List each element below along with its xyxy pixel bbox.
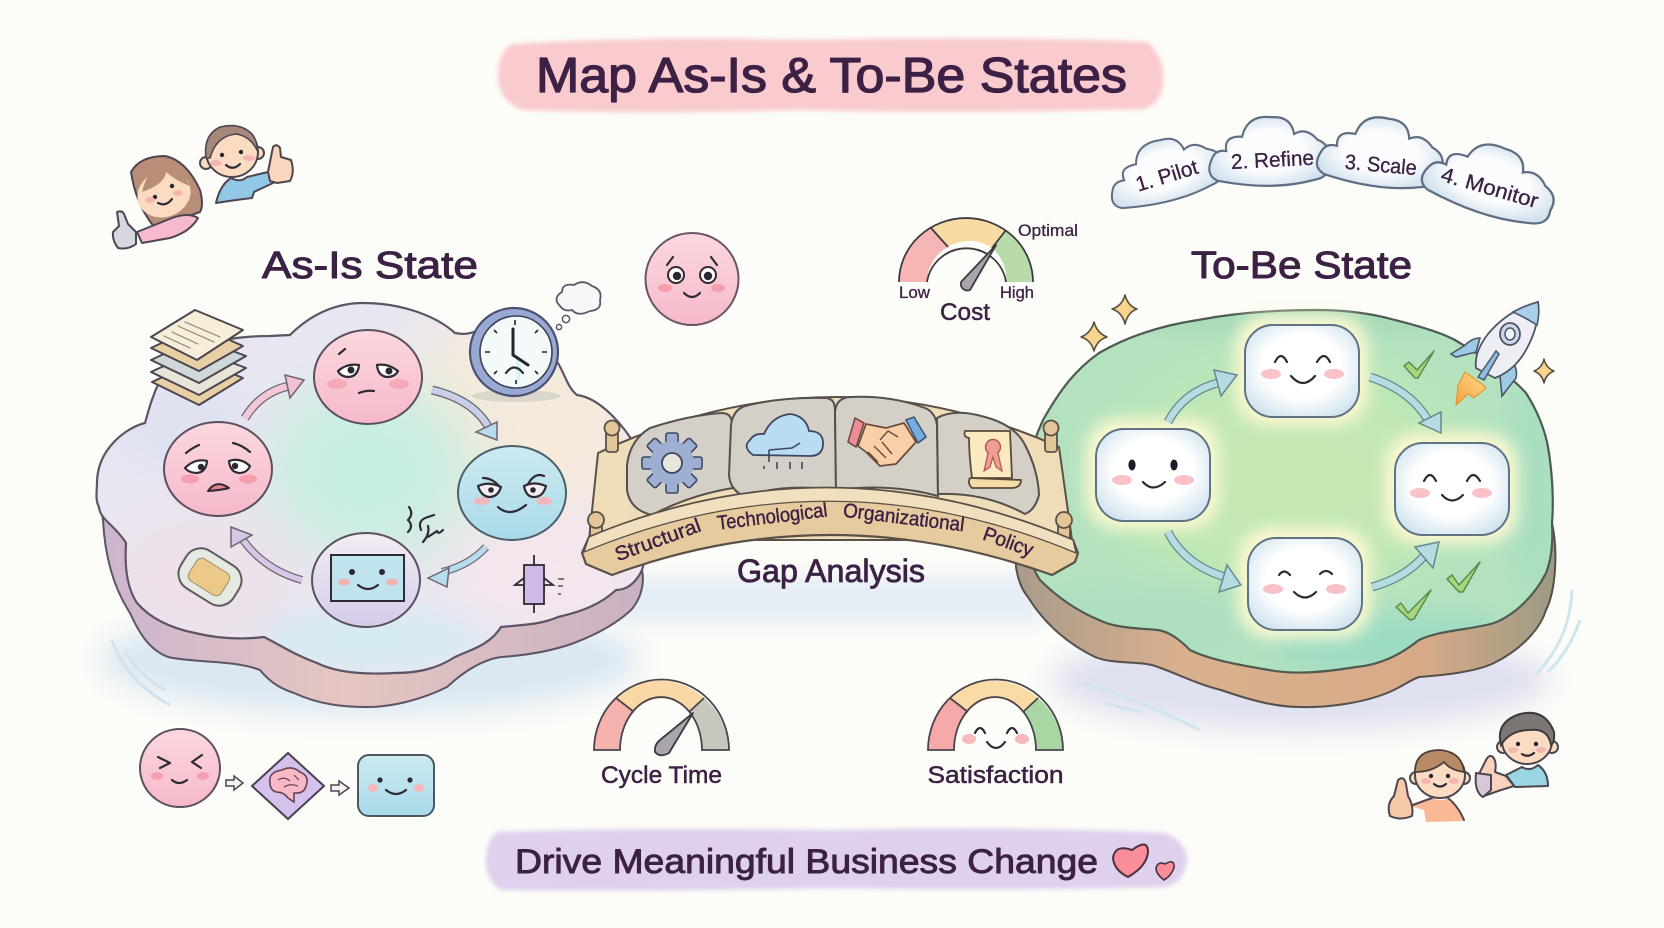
icon: check marks: [1396, 351, 1480, 620]
island side wall: [97, 457, 643, 707]
label: structural: Structural: [612, 515, 704, 566]
arrow: bottom to right: [1372, 542, 1439, 587]
heading: To-Be State: To-Be State: [1191, 245, 1412, 287]
icon: candlestick: [515, 555, 564, 613]
people bottom right: [1389, 713, 1558, 822]
floating pink face: [646, 233, 738, 325]
icon: soap bar: [172, 542, 248, 612]
thought cloud: [556, 282, 601, 314]
icon: squiggles: [408, 507, 443, 542]
panel: as-is island: [90, 295, 650, 707]
cloud: scale: [1315, 112, 1446, 192]
decision flow bottom left: [140, 729, 434, 819]
cloud: monitor: [1417, 128, 1564, 232]
stone: policy scroll: [937, 413, 1039, 514]
gauge label: low: Low: [899, 283, 931, 302]
step: smug blue face right: [458, 446, 566, 540]
step: screen face bottom: [312, 533, 420, 627]
arrow: right to bottom: [428, 547, 486, 587]
island side wall: [1016, 520, 1555, 707]
gauge: cycle time: [594, 679, 729, 789]
stone: technological cloud: [729, 398, 836, 497]
gauge label: Cycle Time: [601, 762, 722, 789]
icon: paper stack: [151, 310, 246, 405]
soft water shadow under islands: [100, 575, 1580, 730]
glow behind to-be boxes: [1086, 315, 1518, 638]
icon: rocket: [1451, 302, 1539, 405]
deck rim: [584, 488, 1076, 553]
gap analysis bridge: [582, 397, 1078, 575]
heading: As-Is State: As-Is State: [262, 245, 478, 287]
label: policy: Policy: [980, 523, 1036, 562]
cloud: pilot: [1099, 124, 1229, 217]
cloud: refine: [1207, 114, 1331, 189]
cloud: monitor: 4. Monitor: [1438, 163, 1541, 213]
step: happy box top: [1245, 325, 1359, 417]
step: happy box bottom: [1248, 538, 1362, 630]
arrow: small: [226, 776, 243, 790]
arrow: top to right: [1370, 377, 1441, 433]
closing banner: Drive Meaningful Business Change: [515, 843, 1098, 881]
arrow: small: [331, 781, 349, 795]
bridge posts: [588, 420, 1072, 548]
gauge: cost: [899, 218, 1078, 326]
island top surface: [1036, 311, 1552, 672]
label: organizational: Organizational: [842, 500, 966, 536]
island top surface: [90, 295, 650, 680]
step: happy box left: [1096, 429, 1210, 521]
face: frustrated: [140, 729, 220, 807]
gauge: satisfaction: [928, 679, 1064, 789]
gauge label: cost: Cost: [940, 299, 990, 326]
arrow: bottom to left: [231, 527, 302, 580]
closing banner: [486, 829, 1187, 891]
arrow: top to right: [432, 390, 497, 440]
stone: structural gear: [627, 413, 733, 515]
step: sad face left: [164, 422, 272, 516]
icon: clock with thought cloud: [470, 282, 601, 402]
icon: large heart: [1113, 844, 1148, 877]
cloud: scale: 3. Scale: [1344, 151, 1418, 180]
panel: to-be island: [1010, 298, 1563, 707]
icon: brain diamond: [252, 753, 324, 819]
bridge deck: [582, 488, 1078, 575]
stone: organizational handshake: [835, 397, 938, 496]
step: worried face top: [314, 330, 422, 424]
title banner: Map As-Is & To-Be States: [536, 49, 1127, 103]
people top left: [113, 126, 293, 248]
label: technological: Technological: [716, 499, 829, 535]
gauge label: high: High: [1000, 283, 1034, 302]
arrow: left to top: [245, 375, 304, 418]
gauge label: Satisfaction: [928, 762, 1064, 789]
bridge back wall: [589, 397, 1072, 540]
arrow: left to bottom: [1168, 532, 1241, 592]
icon: small heart: [1156, 862, 1174, 880]
process clouds: [1099, 112, 1564, 232]
cloud: refine: 2. Refine: [1230, 147, 1315, 174]
arrow: left to top: [1168, 370, 1237, 422]
title banner: [498, 38, 1163, 112]
caption: gap analysis: Gap Analysis: [737, 553, 925, 589]
step: happy box right: [1395, 443, 1509, 535]
icon: sparkle stars: [1081, 295, 1554, 383]
face: calm blue box: [358, 755, 434, 816]
gauge label: optimal: Optimal: [1018, 221, 1078, 240]
cloud: pilot: 1. Pilot: [1133, 156, 1201, 197]
